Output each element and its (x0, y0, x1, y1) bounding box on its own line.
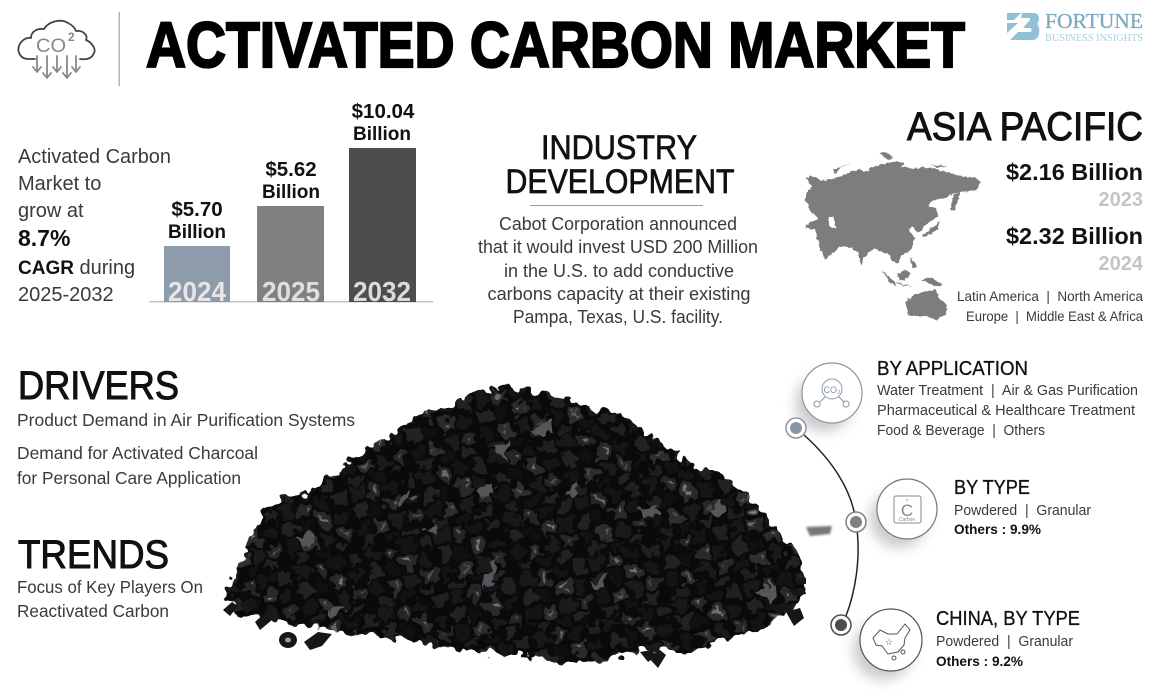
text block: China by type (936, 608, 1080, 669)
bar 2024: $5.70 (171, 198, 223, 221)
logo: Fortune Business Insights (1007, 9, 1143, 44)
icon: carbon element circle (870, 479, 937, 548)
connector arc (804, 435, 858, 616)
text block: industry development: in the U.S. to add conductive (504, 261, 734, 281)
panel: by type (846, 477, 1091, 548)
bar 2025 (257, 158, 324, 307)
panel: drivers: for Personal Care Application (17, 468, 241, 488)
panel: drivers: DRIVERS (18, 364, 179, 408)
header divider (118, 12, 120, 86)
text block: CAGR summary (18, 146, 171, 306)
heading: Asia Pacific: ASIA PACIFIC (907, 105, 1143, 149)
text block: industry development: Cabot Corporation announced (499, 214, 737, 234)
timeline node (786, 418, 806, 438)
panel: China by type (831, 608, 1080, 680)
bar 2032: Billion (353, 124, 411, 145)
icon: carbon element circle: 6 (906, 497, 909, 502)
text block: industry development: that it would invest USD 200 Million (478, 237, 758, 257)
text block: industry development: carbons capacity at their existing (488, 284, 750, 304)
icon: CO2 molecule circle: CO₂ (824, 385, 841, 395)
bar 2032: $10.04 (352, 100, 415, 123)
heading: industry development (506, 129, 734, 201)
stats: Asia Pacific (1006, 159, 1144, 275)
text block: by application: Food & Beverage | Others (877, 422, 1045, 439)
text block: China by type: Powdered | Granular (936, 633, 1073, 650)
icon: CO2 cloud: 2 (68, 30, 75, 44)
text block: by type: Others : 9.9% (954, 521, 1042, 537)
bar 2024: Billion (168, 222, 226, 243)
stats: Asia Pacific: $2.32 Billion (1006, 223, 1143, 249)
timeline node (846, 512, 866, 532)
icon: carbon element circle: C (901, 501, 913, 520)
text block: other regions: Latin America | North America (957, 288, 1143, 304)
image: activated carbon pile (223, 385, 832, 668)
icon: China map circle (853, 609, 922, 680)
panel: trends: Focus of Key Players On (17, 577, 203, 597)
bar 2025: $5.62 (265, 158, 317, 181)
bar 2032 (349, 100, 416, 307)
text block: other regions: Europe | Middle East & Africa (966, 308, 1143, 324)
map: Asia Pacific (805, 152, 980, 320)
logo: Fortune Business Insights: BUSINESS INSIGHTS (1045, 32, 1143, 44)
text block: by application (877, 358, 1138, 439)
text block: CAGR summary: 2025-2032 (18, 284, 114, 306)
bar 2025: 2025 (262, 276, 320, 307)
text block: China by type: Others : 9.2% (936, 653, 1024, 669)
panel: trends: Reactivated Carbon (17, 601, 169, 621)
logo: Fortune Business Insights: FORTUNE (1045, 9, 1143, 33)
text block: by application: Pharmaceutical & Healthcare Treatment (877, 402, 1136, 419)
bar chart: market size (149, 100, 433, 307)
heading: industry development: DEVELOPMENT (506, 163, 734, 201)
text block: CAGR summary: 8.7% (18, 225, 70, 251)
text block: industry development: Pampa, Texas, U.S. facility. (513, 307, 723, 327)
icon: CO2 cloud (18, 21, 95, 78)
icon: carbon element circle: Carbon (899, 517, 915, 523)
text block: CAGR summary: CAGR during (18, 257, 135, 279)
icon: CO2 cloud: CO (36, 36, 66, 57)
icon: China map circle: ☆ (885, 637, 893, 647)
text block: by type (954, 477, 1091, 537)
text block: China by type: CHINA, BY TYPE (936, 608, 1080, 630)
text block: by type: BY TYPE (954, 477, 1030, 499)
panel: drivers: Demand for Activated Charcoal (17, 443, 258, 463)
bar 2025: Billion (262, 182, 320, 203)
text block: CAGR summary: Market to (18, 173, 101, 195)
title: ACTIVATED CARBON MARKET (146, 9, 965, 81)
bar 2024 (164, 198, 230, 307)
stats: Asia Pacific: 2023 (1098, 189, 1143, 211)
icon: CO2 molecule circle (795, 363, 862, 432)
text block: by type: Powdered | Granular (954, 502, 1091, 519)
panel: drivers (17, 364, 355, 488)
timeline node (831, 615, 851, 635)
text block: CAGR summary: Activated Carbon (18, 146, 171, 168)
text block: CAGR summary: grow at (18, 200, 84, 222)
stats: Asia Pacific: 2024 (1098, 253, 1144, 275)
bar 2024: 2024 (168, 276, 226, 307)
text block: by application: Water Treatment | Air & Gas Purification (877, 382, 1138, 399)
panel: by application (786, 358, 1138, 439)
heading: industry development: INDUSTRY (541, 129, 697, 167)
text block: industry development (478, 214, 758, 327)
panel: trends: TRENDS (18, 533, 169, 577)
stats: Asia Pacific: $2.16 Billion (1006, 159, 1143, 185)
text block: other regions (957, 288, 1143, 324)
text block: by application: BY APPLICATION (877, 358, 1028, 380)
panel: trends (17, 533, 203, 621)
bar 2032: 2032 (353, 276, 411, 307)
panel: drivers: Product Demand in Air Purification Systems (17, 410, 355, 430)
loose carbon pieces (223, 510, 832, 668)
